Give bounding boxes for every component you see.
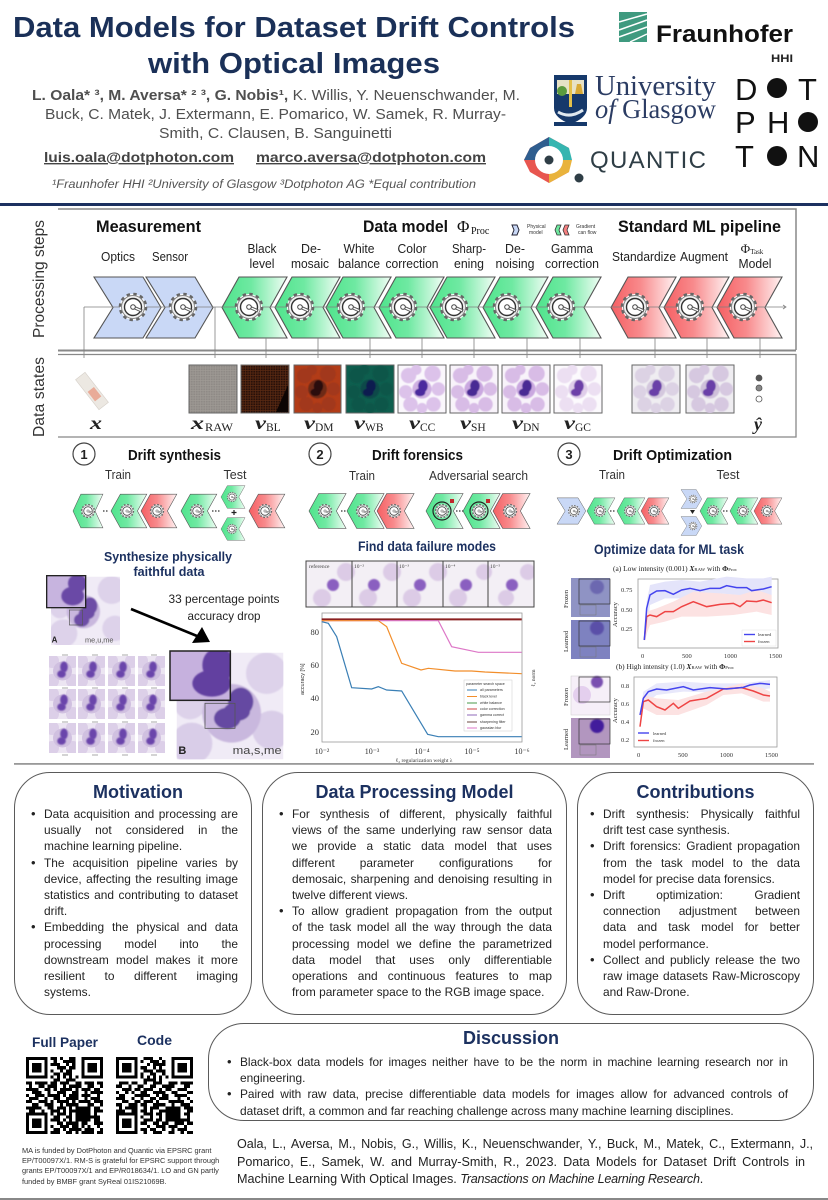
legend: model types [512,224,597,236]
images: low intensity: Learned [563,630,570,652]
logo: Dotphoton [735,72,819,174]
data state labels: x [89,413,102,433]
thumbnail contents [276,365,733,413]
logo: Quantic [524,137,706,183]
chart a title: (a) Low intensity (0.001) XRAW with ΦProc [613,565,737,573]
data state labels: v [460,413,472,433]
chart legend: color correction [480,707,505,711]
reference citation [237,1137,813,1186]
heading: drift optimization: Drift Optimization [613,447,732,464]
bottom rule [0,1198,828,1200]
contact emails: luis.oala@dotphoton.com [44,149,234,165]
text: motivation bullets: machine learning pipeline. [44,839,182,853]
data state labels: v [255,413,267,433]
chart b: high intensity: 0 [637,752,640,759]
chart b: high intensity: 0.8 [621,683,629,690]
heading: data model: Data model [363,217,448,236]
chart legend [464,680,512,731]
funding acknowledgement: EP/T00097X/1. RM-S is grateful for EPSRC support through [22,1156,219,1165]
text: data processing bullets: data model that uses only differentiable [292,953,552,967]
step labels: De- [301,242,321,256]
chart b title: (b) High intensity (1.0) XRAW with ΦProc [616,663,734,671]
step number 1 [73,443,95,465]
chart a: low intensity: 0 [641,653,644,660]
chart legend: black level [480,694,497,698]
text: contributions bullets: Drift forensics: Gradient propagation [603,839,800,853]
step labels: Standardize [612,250,676,264]
step number 3 [558,443,580,465]
arrow: A to B [131,609,210,643]
chart a legend: learned [758,632,772,637]
pipeline diagram [557,490,782,535]
chart a legend [742,630,776,646]
reference citation: Pomarico, E., Samek, W. and Murray-Smith, R., 2023. Data Models for Dataset Drift Controls in [237,1155,805,1169]
data state labels: ŷ [752,414,763,434]
heading: data processing model: Data Processing Model [315,782,514,802]
pipeline diagram [309,494,530,528]
text: data processing bullets: To allow gradient propagation from the output [292,904,552,918]
step labels: Gamma [551,242,593,256]
image strip: 10⁻³ [399,564,409,570]
panel: discussion [208,1023,814,1121]
text: motivation bullets: Data acquisition and processing are [44,807,238,821]
logo: Dotphoton: N [797,139,819,174]
chart legend: gaussian blur [480,726,502,730]
text: data processing bullets: we provide a static data model that uses [292,839,552,853]
data state labels: v [354,413,366,433]
image strip: 10⁻² [354,564,364,570]
chart: accuracy vs regularization: ℓ₂ norm [531,669,537,687]
text: data processing bullets: twelve different views. [292,888,408,902]
authors [32,88,520,142]
authors: Buck, C. Matek, J. Extermann, E. Pomarico, W. Samek, R. Murray- [45,107,506,123]
panel: drift optimization [557,443,782,759]
step labels: ening [454,257,484,271]
callout: accuracy drop: 33 percentage points [168,592,280,606]
funding acknowledgement [22,1146,219,1186]
image A: A [52,635,58,644]
reference citation: Oala, L., Aversa, M., Nobis, G., Willis, K., Neuenschwander, Y., Buck, M., Matek, C., Extermann, J., [237,1137,813,1151]
QR code: code [116,1057,193,1134]
step labels [101,241,772,271]
text: motivation bullets: drift. [44,904,67,918]
heading: data model: Proc [471,226,490,237]
image strip: 10⁻⁴ [445,564,455,570]
image A: me,u,me [85,635,114,644]
text: contributions bullets: Drift optimization: Gradient [603,888,800,902]
step labels: Black [248,242,277,256]
step labels: Task [750,248,764,256]
chart b: high intensity: 0.4 [621,719,630,726]
chart legend: sharpening filter [480,720,506,724]
subheading: find failure modes: Find data failure modes [358,539,496,554]
funding acknowledgement: grants EP/T00097X/1 and EP/R018634/1. LO and GN partly [22,1166,219,1175]
images: low intensity: Frozen [563,589,570,608]
logo: Quantic: QUANTIC [590,147,706,174]
chart a: low intensity: 0.50 [621,607,632,614]
text: contributions bullets: model for precise data forensics. [603,872,775,886]
chart b legend: learned [653,731,667,736]
image B: ma,s,me [233,745,282,757]
heading: full paper: Full Paper [32,1035,99,1050]
data state labels [89,413,763,434]
step labels: Color [398,242,426,256]
funding acknowledgement: funded by BMBF grant SyReal 01IS21069B. [22,1177,167,1186]
logo: University of Glasgow: of Glasgow [595,94,716,124]
chart: accuracy vs regularization: 10⁻⁵ [464,747,480,756]
contact emails: marco.aversa@dotphoton.com [256,149,486,165]
grid of twelve views [45,654,169,755]
logo: University of Glasgow [554,71,716,126]
labels: train and test: Test [224,468,247,482]
step labels: Augment [680,250,729,264]
step number 2 [309,443,331,465]
panel: drift forensics [300,443,537,764]
reference citation: Machine Learning With Optical Images. Transactions on Machine Learning Research. [237,1172,703,1186]
chart: accuracy vs regularization: 10⁻⁴ [414,747,430,756]
text: motivation bullets: Embedding the physical and data [44,920,238,934]
text: discussion bullets: Black-box data models for images neither have to be the norm in machine learning research nor in [240,1055,788,1069]
data state labels: v [409,413,421,433]
logo: Dotphoton: T [735,139,754,174]
text: contributions bullets: and Raw-Drone. [603,985,690,999]
chart legend: parameter search space [466,682,505,686]
authors: Smith, C. Clausen, B. Sanguinetti [159,126,392,142]
text: motivation bullets: systems. [44,985,91,999]
text: discussion bullets [228,1055,788,1118]
chart b: high intensity: 500 [678,752,688,759]
heading: motivation: Motivation [93,782,183,802]
chart: accuracy vs regularization: 40 [310,693,319,703]
subheading: optimize data: Optimize data for ML task [594,542,744,557]
text: data processing bullets [280,807,552,999]
text: discussion bullets: dataset drift, a common and far reaching challenge across many machine learning disciplines. [240,1104,734,1118]
panel: data processing model [262,772,567,1015]
text: data processing bullets: from parameter space to the RGB image space. [292,985,544,999]
text: motivation bullets: usually not considered in the [44,823,238,837]
step number 2: 2 [316,447,324,462]
chart a: low intensity: 0.75 [621,587,632,594]
step number 1: 1 [80,447,88,462]
images: low intensity [563,578,610,659]
text: data processing bullets: views of the same underlying raw sensor data [292,823,552,837]
labels: train and test: Train [105,468,131,482]
legend: model types: Gradient [576,224,596,230]
output probability dots [756,375,762,402]
subheading: synthesize: Synthesize physically [104,549,233,564]
heading: standard ML pipeline: Standard ML pipeline [618,217,781,236]
step labels: Model [738,257,772,271]
text: motivation bullets: The acquisition pipeline varies by [44,856,238,870]
chart b: high intensity: Accuracy [612,697,619,723]
step labels: correction [386,257,439,271]
step labels: White [344,242,375,256]
affiliations: ¹Fraunhofer HHI ²University of Glasgow ³Dotphoton AG *Equal contribution [52,177,476,191]
chart: accuracy vs regularization: 10⁻³ [365,747,380,756]
legend: model types: can flow [578,230,597,236]
chart a: low intensity: 1000 [724,653,737,660]
logo: Fraunhofer: HHI [771,53,793,65]
step labels: level [250,257,274,271]
text: discussion bullets: engineering. [240,1071,305,1085]
text: data processing bullets: processing model we define the parametrized [292,936,552,950]
labels: train and test: Test [716,468,740,482]
title [13,12,575,80]
panel: data states [31,354,796,437]
heading: data model: Φ [457,217,469,236]
subheading: synthesize: faithful data [134,564,205,579]
text: data processing bullets: of the task model all the way through the data [292,920,552,934]
chart b: high intensity: 1000 [720,752,733,759]
funding acknowledgement: MA is funded by DotPhoton and Quantic via EPSRC grant [22,1146,211,1155]
step labels: Sensor [152,250,188,264]
images: high intensity: Learned [563,728,570,750]
chart b: high intensity: 0.2 [621,737,629,744]
QR code: full paper [26,1057,103,1134]
chart: accuracy vs regularization: 10⁻² [315,747,330,756]
label: processing steps: Processing steps [31,220,48,338]
contact emails [44,149,486,165]
chart b: high intensity: 1500 [765,752,778,759]
chart a: low intensity: 1500 [769,653,782,660]
chart: accuracy vs regularization: 20 [310,727,319,737]
step number 3: 3 [565,447,573,462]
authors: L. Oala* ³, M. Aversa* ² ³, G. Nobis¹, K. Willis, Y. Neuenschwander, M. [32,88,520,104]
text: motivation bullets: resilient to different imaging [44,969,238,983]
heading: data model [363,217,490,237]
image B: B [178,745,186,757]
icon: microscope slide [76,372,108,410]
label: data states: Data states [31,357,48,437]
data state labels: RAW [205,422,233,434]
header divider [0,203,828,206]
panel: motivation [14,772,252,1015]
logo: Fraunhofer: Fraunhofer [656,21,793,48]
step labels: correction [545,257,599,271]
data state labels: DN [523,422,540,434]
chart a legend: frozen [758,639,770,644]
flow axis and connectors [84,305,786,358]
text: contributions bullets [590,807,800,999]
chart legend: all parameters [480,688,503,692]
chart: accuracy vs regularization: 10⁻⁶ [514,747,530,756]
text: contributions bullets: model performance. [603,936,709,950]
subheading: synthesize [104,549,233,579]
text: contributions bullets: from the task model to the data [603,856,800,870]
heading: measurement: Measurement [96,217,201,236]
step labels: balance [338,257,380,271]
text: contributions bullets: data and task model for better [603,920,800,934]
images: high intensity: Frozen [563,687,570,706]
text: contributions bullets: drift test case synthesis. [603,823,730,837]
callout: accuracy drop: accuracy drop [188,609,261,623]
data state labels: v [512,413,524,433]
gear dials [120,294,756,320]
image strip: 10⁻⁵ [490,564,500,570]
callout: accuracy drop [168,592,280,623]
logo: Dotphoton: P [735,105,756,140]
lower divider [14,763,814,765]
text: motivation bullets: statistics and contributing to dataset [44,888,238,902]
chart b legend: frozen [653,738,665,743]
step labels: De- [505,242,525,256]
chart a: low intensity: 500 [682,653,692,660]
logo: Fraunhofer [619,12,793,65]
image A [47,574,128,647]
chart b: high intensity: 0.6 [621,701,630,708]
chart: accuracy vs regularization: 80 [310,627,319,637]
data state labels: v [564,413,576,433]
data state labels: WB [365,422,384,434]
text: contributions bullets: connection adjustment between [603,904,800,918]
heading: drift forensics: Drift forensics [372,447,463,464]
chart: accuracy vs regularization: accuracy [%] [300,663,306,695]
chart legend: gamma correct [480,713,504,717]
text: contributions bullets: Drift synthesis: Physically faithful [603,807,800,821]
data state labels: v [304,413,316,433]
title: Data Models for Dataset Drift Controls [13,12,575,44]
data state labels: GC [575,422,591,434]
data state labels: x [190,413,204,433]
legend: model types: model [529,230,543,236]
image strip: reference [309,563,330,570]
step labels: Sharp- [452,242,486,256]
text: contributions bullets: raw image datasets Raw-Microscopy [603,969,800,983]
heading: discussion: Discussion [463,1028,559,1048]
images: high intensity [563,676,610,758]
panel: drift synthesis [45,443,291,764]
heading: contributions: Contributions [636,782,754,802]
labels: train and test: Train [599,468,625,482]
chart legend: white balance [480,701,502,705]
data state labels: CC [420,422,436,434]
labels: train and adversarial search: Train [349,469,375,483]
text: data processing bullets: demosaic, sharpening and denoising resulting in [292,872,552,886]
pipeline diagram [73,486,285,540]
data state labels: DM [315,422,334,434]
text: data processing bullets: For synthesis of different, physically faithful [292,807,552,821]
text: data processing bullets: different parameter configurations for [292,856,552,870]
chart: accuracy vs regularization: ℓ₂ regularization weight λ [396,758,453,764]
chart b: high intensity [612,677,778,759]
step labels: noising [496,257,535,271]
chart b legend [638,731,667,743]
heading: code: Code [137,1033,173,1048]
text: motivation bullets: downstream model makes it more [44,953,238,967]
text: motivation bullets [32,807,238,999]
image strip [306,561,536,607]
process chevrons [94,277,782,338]
step labels: Φ [741,241,750,256]
image B [170,648,291,764]
chart: accuracy vs regularization: 60 [310,660,319,670]
panel: contributions [577,772,814,1015]
text: motivation bullets: processing model into the [44,936,238,950]
labels: train and adversarial search [349,469,528,483]
chart a: low intensity: 0.25 [621,626,632,633]
labels: train and test [105,468,247,482]
chart a: low intensity: Accuracy [612,601,619,627]
text: data processing bullets: operations and continuous features to map [292,969,552,983]
data state thumbnails [189,365,734,413]
title: with Optical Images [147,48,440,80]
step labels: Optics [101,250,135,264]
logo: Dotphoton: T [798,72,817,107]
legend: model types: Physical [527,224,546,230]
text: contributions bullets: Collect and publicly release the two [603,953,800,967]
text: discussion bullets: Paired with raw data, precise differentiable data models for images allow for advanced controls of [240,1087,788,1101]
data state labels: SH [471,422,486,434]
logo: University of Glasgow: University [595,71,716,102]
logo: Dotphoton: D [735,72,757,107]
labels: train and adversarial search: Adversarial search [429,469,528,483]
panel: processing steps [31,209,796,358]
text: motivation bullets: device, affecting the resulting image [44,872,238,886]
labels: train and test [599,468,740,482]
step labels: mosaic [291,257,329,271]
heading: drift synthesis: Drift synthesis [128,447,221,464]
chart: accuracy vs regularization [300,613,537,764]
chart a: low intensity [612,577,782,660]
data state labels: BL [266,422,281,434]
logo: Dotphoton: H [767,105,789,140]
